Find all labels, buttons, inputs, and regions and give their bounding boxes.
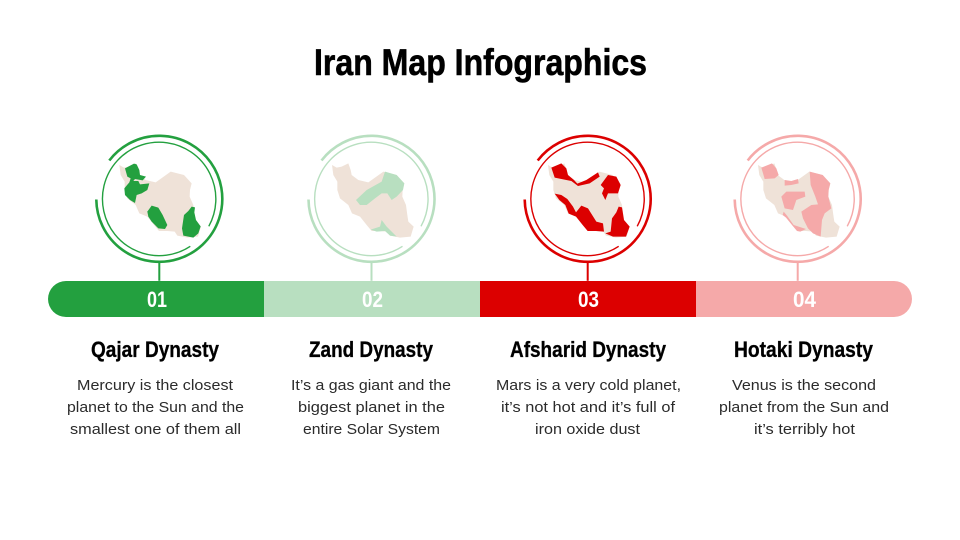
description: biggest planet in the — [298, 400, 445, 416]
heading: Zand Dynasty — [309, 337, 434, 362]
panel: Zand Dynasty — [291, 136, 451, 438]
heading: Qajar Dynasty — [91, 337, 220, 362]
description: smallest one of them all — [70, 422, 241, 438]
description — [291, 378, 451, 438]
title: Iran Map Infographics — [314, 42, 647, 83]
description: iron oxide dust — [535, 422, 640, 438]
description: it’s not hot and it’s full of — [501, 400, 676, 416]
panel: Afsharid Dynasty — [496, 136, 681, 438]
ring icon 4 — [735, 136, 861, 281]
description: it’s terribly hot — [754, 422, 855, 438]
ring icon 2 — [308, 136, 434, 281]
description — [719, 378, 889, 438]
number 02: 02 — [362, 287, 383, 312]
ring icon 3 — [525, 136, 651, 281]
map 3 — [548, 163, 630, 238]
description — [67, 378, 244, 438]
map 4 — [758, 163, 840, 238]
description — [496, 378, 681, 438]
heading: Hotaki Dynasty — [734, 337, 874, 362]
description: Mercury is the closest — [77, 378, 233, 394]
number 03: 03 — [578, 287, 599, 312]
panel: Qajar Dynasty — [67, 136, 244, 438]
number 01: 01 — [147, 287, 167, 312]
description: Venus is the second — [732, 378, 876, 394]
description: It’s a gas giant and the — [291, 378, 451, 394]
heading: Afsharid Dynasty — [510, 337, 667, 362]
description: Mars is a very cold planet, — [496, 378, 681, 394]
map 1 — [119, 163, 201, 238]
description: entire Solar System — [303, 422, 440, 438]
map 2 — [332, 163, 414, 238]
description: planet from the Sun and — [719, 400, 889, 416]
timeline bar — [48, 281, 912, 317]
description: planet to the Sun and the — [67, 400, 244, 416]
number 04: 04 — [793, 287, 817, 312]
panel: Hotaki Dynasty — [719, 136, 889, 438]
ring icon 1 — [96, 136, 222, 281]
